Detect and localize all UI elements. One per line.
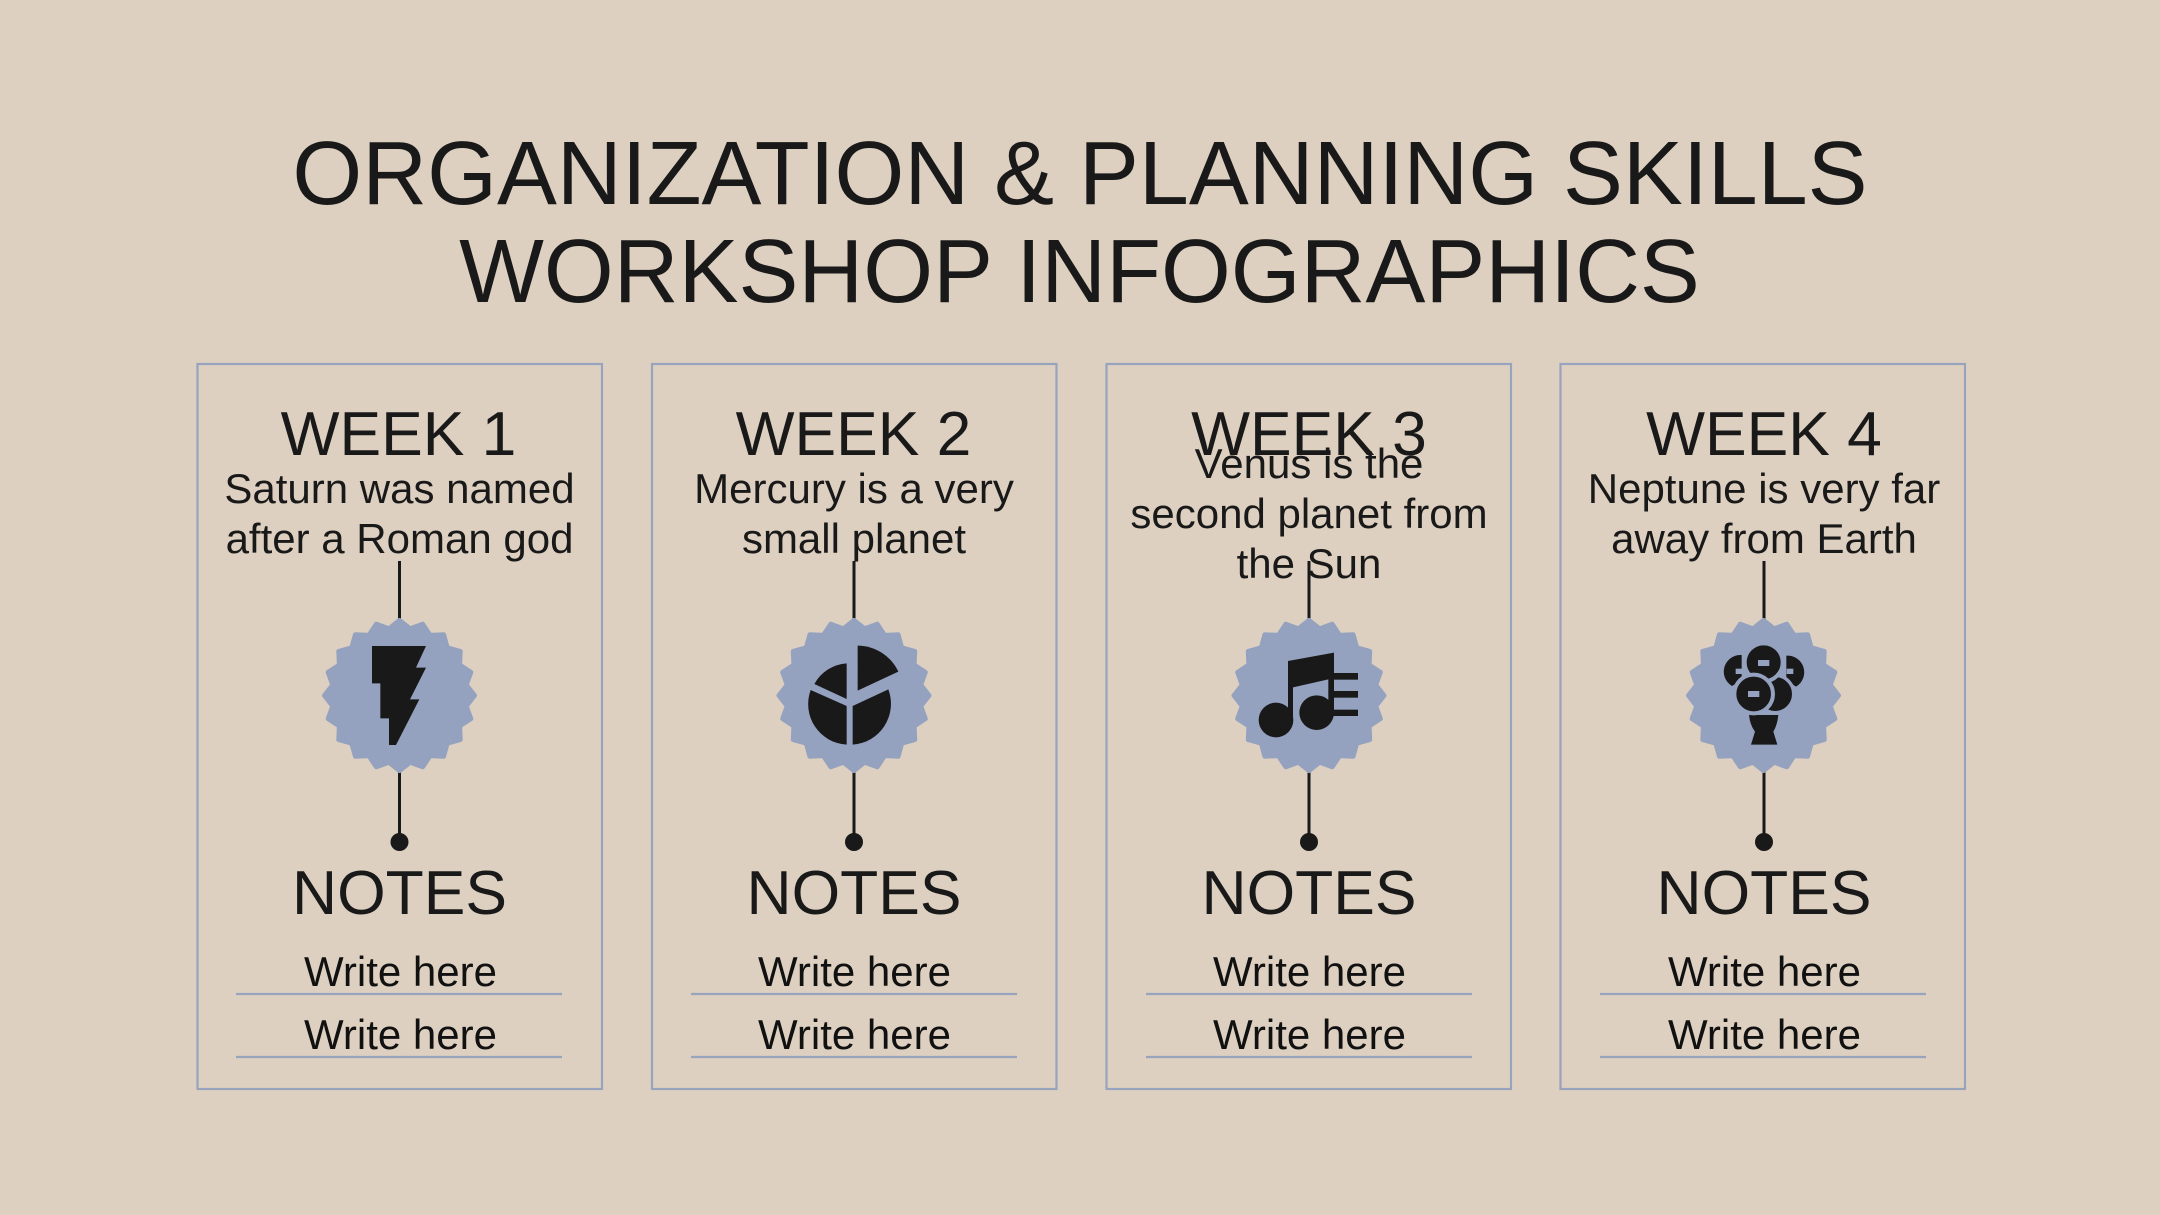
notes lines: week 4 — [1600, 948, 1926, 1058]
text block: week 4 description: away from Earth — [1611, 515, 1917, 562]
connector: week 4 — [1755, 561, 1773, 851]
icon: lightning bolt — [372, 646, 426, 745]
text block: week 2 description: Mercury is a very — [694, 465, 1014, 512]
notes lines: week 1: Write here — [304, 1011, 497, 1058]
panel: week 1 — [198, 364, 602, 1089]
notes lines: week 3 — [1146, 948, 1472, 1058]
connector: week 1 — [390, 561, 408, 851]
heading: notes 3: NOTES — [1202, 859, 1416, 928]
heading: week 4: WEEK 4 — [1646, 400, 1882, 469]
notes lines: week 1: Write here — [304, 948, 497, 995]
icon: pie chart — [808, 646, 898, 745]
icon: flower bouquet — [1724, 643, 1804, 745]
heading: notes 2: NOTES — [747, 859, 961, 928]
notes lines: week 3: Write here — [1213, 1011, 1406, 1058]
title — [292, 124, 1868, 322]
connector: week 3 — [1300, 561, 1318, 851]
heading: notes 1: NOTES — [292, 859, 507, 928]
text block: week 1 description — [224, 465, 575, 562]
text block: week 3 description: Venus is the — [1195, 440, 1423, 487]
text block: week 4 description — [1588, 465, 1940, 562]
badge: week 4 — [1688, 620, 1838, 770]
text block: week 1 description: Saturn was named — [224, 465, 575, 512]
heading: notes 4: NOTES — [1657, 859, 1871, 928]
title: ORGANIZATION & PLANNING SKILLS — [292, 124, 1868, 224]
notes lines: week 3: Write here — [1213, 948, 1406, 995]
text block: week 2 description: small planet — [742, 515, 966, 562]
text block: week 3 description: the Sun — [1237, 540, 1381, 587]
panel: week 4 — [1560, 364, 1965, 1089]
badge: week 1 — [324, 620, 474, 770]
badge: week 3 — [1234, 620, 1384, 770]
notes lines: week 2: Write here — [758, 1011, 951, 1058]
panel: week 3 — [1106, 364, 1511, 1089]
heading: week 2: WEEK 2 — [736, 400, 971, 469]
notes lines: week 4: Write here — [1668, 948, 1861, 995]
notes lines: week 2: Write here — [758, 948, 951, 995]
text block: week 2 description — [694, 465, 1014, 562]
icon: music notes — [1259, 653, 1358, 737]
text block: week 4 description: Neptune is very far — [1588, 465, 1940, 512]
heading: week 3: WEEK 3 — [1191, 400, 1427, 469]
notes lines: week 2 — [691, 948, 1017, 1058]
notes lines: week 4: Write here — [1668, 1011, 1861, 1058]
title: WORKSHOP INFOGRAPHICS — [459, 222, 1700, 322]
text block: week 3 description — [1130, 440, 1488, 587]
notes lines: week 1 — [236, 948, 562, 1058]
text block: week 3 description: second planet from — [1130, 490, 1488, 537]
panel: week 2 — [652, 364, 1056, 1089]
text block: week 1 description: after a Roman god — [226, 515, 573, 562]
connector: week 2 — [845, 561, 863, 851]
badge: week 2 — [779, 620, 929, 770]
heading: week 1: WEEK 1 — [281, 400, 516, 469]
